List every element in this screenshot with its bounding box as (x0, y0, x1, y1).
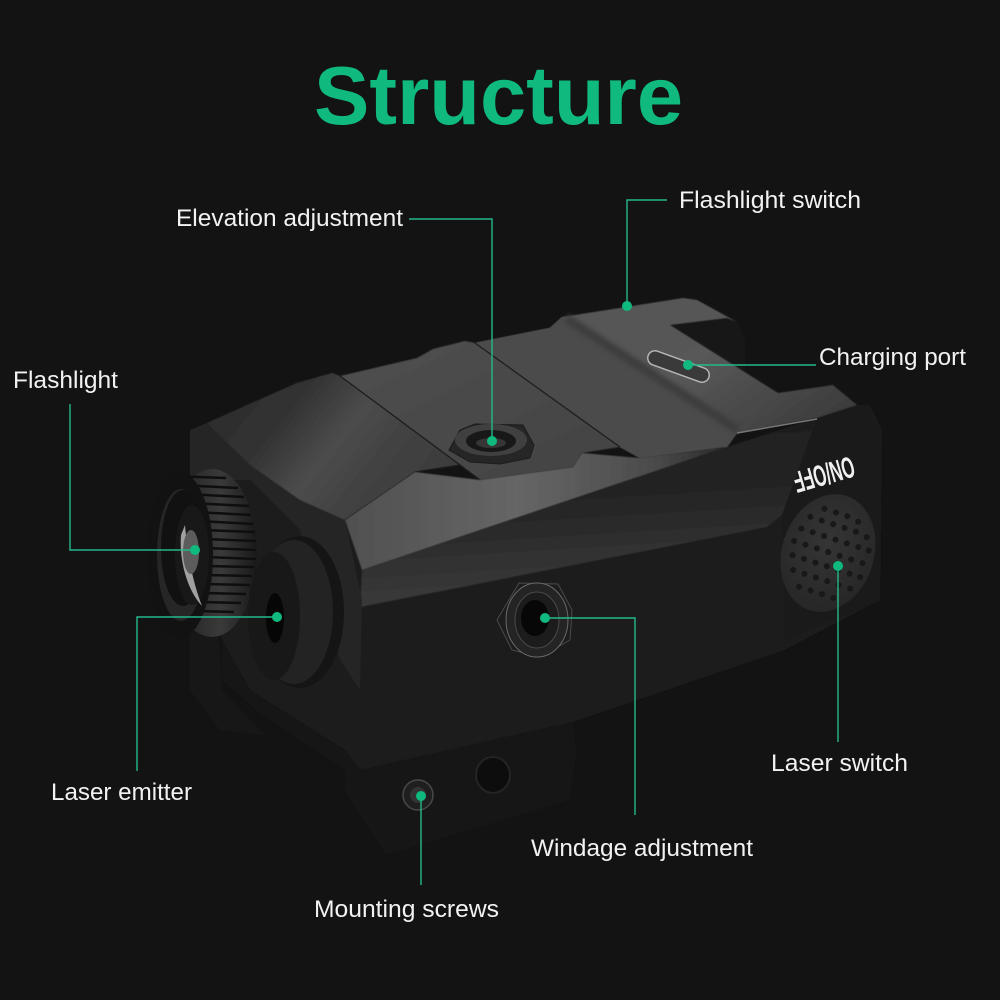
leader line (688, 364, 816, 366)
reflector glint (183, 530, 199, 574)
marker dot (833, 561, 843, 571)
hex base (497, 583, 572, 657)
charging port (655, 358, 702, 375)
silver rail edge highlight (737, 419, 817, 433)
top centre plate (340, 341, 620, 480)
hood top (207, 373, 460, 520)
rail ridge shading (566, 318, 738, 430)
title: Structure (314, 49, 683, 142)
callout: charging port (683, 344, 966, 371)
inner slot (655, 358, 702, 375)
laser switch button (766, 482, 890, 624)
hex nut: windage adjustment (497, 583, 572, 657)
lens reflection (181, 525, 202, 606)
main dark body (190, 405, 882, 770)
lower mount block (222, 600, 800, 855)
label: Elevation adjustment (176, 205, 403, 232)
leader line (70, 404, 195, 550)
label: Flashlight (13, 367, 118, 394)
label: Laser emitter (51, 779, 192, 806)
rear corner dark face (782, 405, 882, 640)
label: Laser switch (771, 750, 908, 777)
left rail clamp (190, 625, 265, 735)
flashlight lens ring (147, 469, 257, 638)
emitter hole (266, 593, 284, 643)
label: Mounting screws (314, 896, 499, 923)
callout: flashlight (13, 367, 200, 555)
callout: flashlight switch (622, 187, 861, 311)
inner ring (515, 592, 559, 648)
marker dot (272, 612, 282, 622)
marker dot (487, 436, 497, 446)
laser emitter housing (248, 536, 344, 688)
right top plate (475, 298, 857, 458)
callout: windage adjustment (531, 613, 753, 862)
label: Charging port (819, 344, 966, 371)
callout: mounting screws (314, 791, 499, 923)
outline (655, 358, 702, 375)
leader line (837, 566, 839, 742)
bezel opening (161, 490, 205, 606)
hex base (449, 424, 534, 464)
leader line (420, 796, 422, 885)
marker dot (683, 360, 693, 370)
band below slope (360, 418, 817, 607)
rail edge lines (340, 343, 620, 520)
rim (506, 583, 568, 657)
rear cylinder (256, 536, 344, 688)
device: laser sight with flashlight (147, 298, 890, 855)
bezel (147, 472, 213, 638)
lens (175, 505, 209, 605)
hex nut: elevation adjustment (449, 424, 534, 464)
lit sloped face (345, 447, 727, 570)
bezel inner ring (157, 489, 205, 621)
knurl grooves (170, 476, 256, 612)
bore (521, 600, 549, 636)
screw centre (410, 787, 426, 803)
callout: laser switch (771, 561, 908, 777)
hood front side face (190, 373, 460, 690)
screw head (403, 780, 433, 810)
middle ring (255, 540, 333, 684)
front face (248, 552, 300, 680)
marker dot (622, 301, 632, 311)
leader line (545, 618, 635, 815)
leader line (137, 617, 277, 771)
marker dot (416, 791, 426, 801)
mounting screw (403, 780, 433, 810)
marker dot (190, 545, 200, 555)
leader line (409, 219, 492, 441)
nut bore (466, 430, 516, 452)
callout: laser emitter (51, 612, 282, 806)
flat strip of right plate (475, 317, 737, 458)
bore glint (476, 438, 506, 448)
leader line (627, 200, 667, 306)
button disc (766, 482, 890, 624)
nut rim (455, 424, 527, 456)
label: Windage adjustment (531, 835, 753, 862)
callout: elevation adjustment (176, 205, 497, 446)
knurled ring (167, 469, 257, 637)
mounting hole (476, 757, 510, 793)
marker dot (540, 613, 550, 623)
rear notch wall (670, 318, 745, 372)
button dimples (777, 499, 881, 608)
label: Flashlight switch (679, 187, 861, 214)
engraved ON/OFF mark: ON/OFF (789, 449, 858, 498)
